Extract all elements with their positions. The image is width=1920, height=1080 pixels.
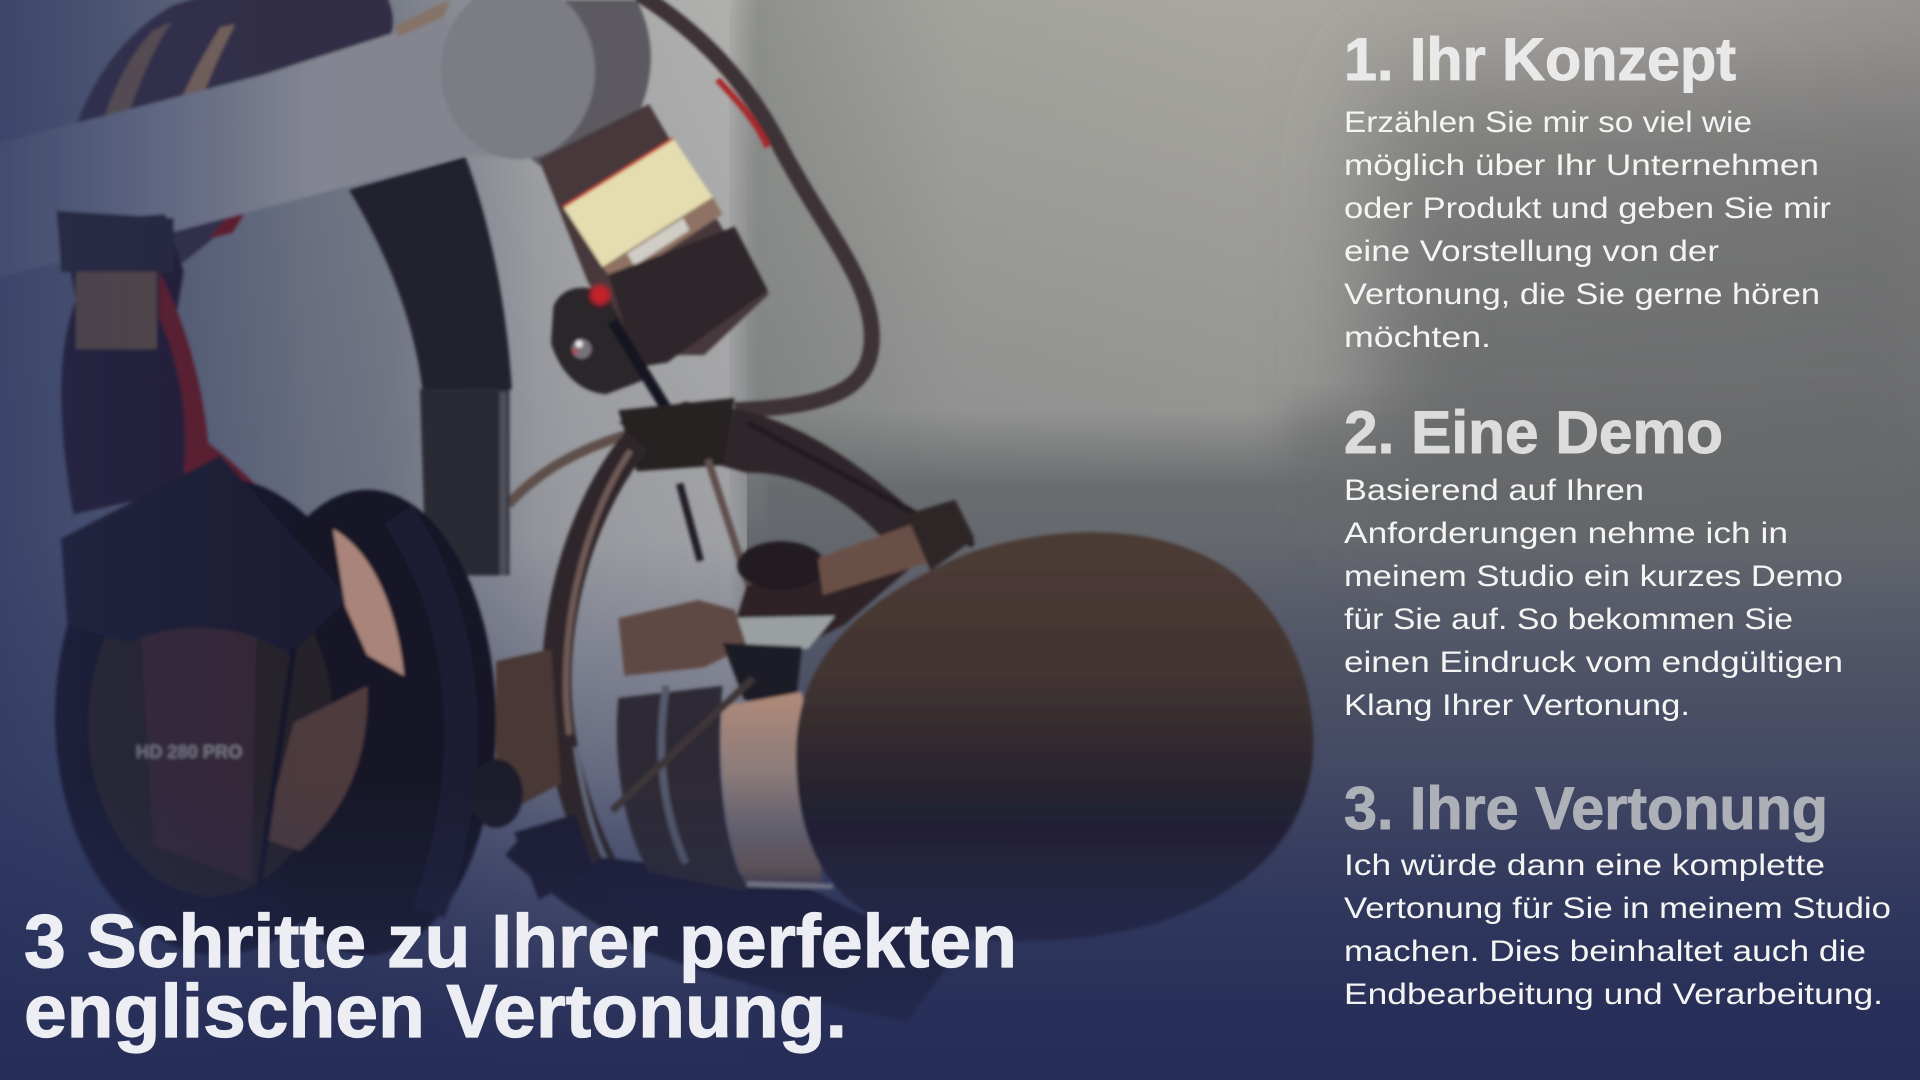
step 2 body: für Sie auf. So bekommen Sie [1344,603,1793,636]
boom arm joint [394,0,651,184]
step 1 heading: 1. Ihr Konzept [1344,26,1736,93]
clamp plate with red light and screw [551,285,667,410]
main title: englischen Vertonung. [24,969,847,1053]
model label on ear cup: HD 280 PRO [136,741,242,762]
suspension struts [514,678,857,986]
step 2 body: meinem Studio ein kurzes Demo [1344,560,1843,593]
headphone headband outer [59,0,393,272]
microphone neck [539,104,769,355]
step 2 body: Anforderungen nehme ich in [1344,517,1788,550]
microphone cable [508,0,872,504]
step 1 block [1344,26,1831,354]
headband inner slider [349,157,512,576]
microphone foam windscreen [796,532,1313,941]
mic clamp block [609,227,768,367]
shock mount outer ring [557,441,762,882]
headband stitched stripes [83,22,272,239]
step 3 body: machen. Dies beinhaltet auch die [1344,935,1866,968]
step 3 body: Vertonung für Sie in meinem Studio [1344,892,1891,925]
step 3 body: Ich würde dann eine komplette [1344,849,1825,882]
step 1 body: Erzählen Sie mir so viel wie [1344,106,1752,139]
step 2 body: Klang Ihrer Vertonung. [1344,689,1690,722]
step 1 body: möchten. [1344,321,1491,354]
step 3 body: Endbearbeitung und Verarbeitung. [1344,978,1883,1011]
step 2 body: Basierend auf Ihren [1344,474,1644,507]
microphone boom arm [0,17,539,279]
microphone body [721,692,823,884]
step 2 body [1344,474,1843,722]
step 1 body: Vertonung, die Sie gerne hören [1344,278,1820,311]
main title: 3 Schritte zu Ihrer perfekten [24,899,1017,983]
step 1 body: oder Produkt und geben Sie mir [1344,192,1831,225]
headband lower strap [56,211,331,612]
shock mount cradle blocks [469,500,975,1022]
step 3 block [1344,775,1891,1011]
step 2 body: einen Eindruck vom endgültigen [1344,646,1843,679]
headphone ear cup [55,456,496,955]
step 1 body: eine Vorstellung von der [1344,235,1719,268]
step 1 body: möglich über Ihr Unternehmen [1344,149,1819,182]
step 1 body [1344,106,1831,354]
shock mount upper arc [618,398,973,545]
step 3 body [1344,849,1891,1011]
glowing band [563,138,722,284]
main title [24,899,1017,1053]
step 3 heading: 3. Ihre Vertonung [1344,775,1828,842]
step 2 heading: 2. Eine Demo [1344,399,1723,466]
step 2 block [1344,399,1843,722]
